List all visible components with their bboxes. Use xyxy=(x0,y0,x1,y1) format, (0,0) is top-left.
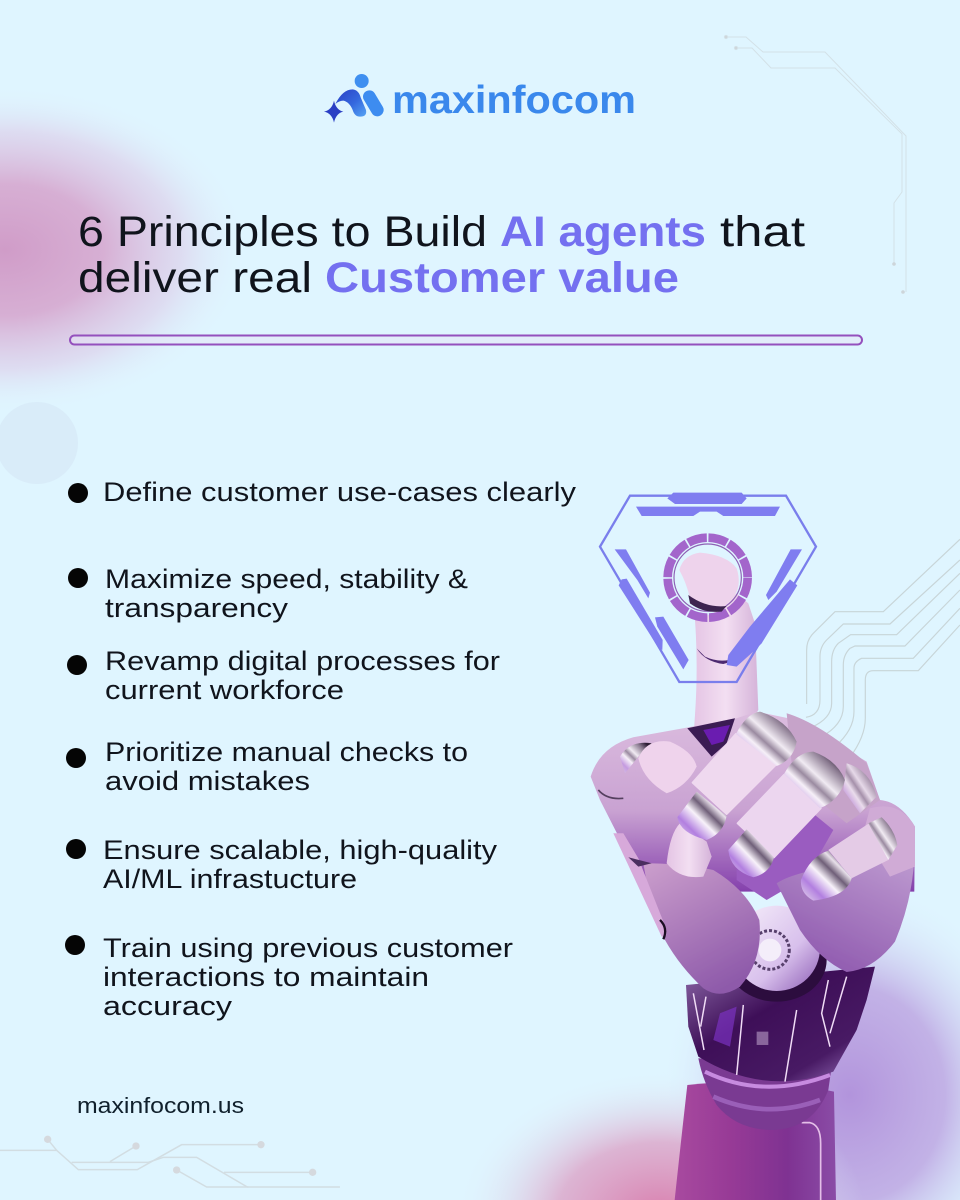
item 4: avoid mistakes xyxy=(105,766,310,796)
forearm xyxy=(675,1082,836,1200)
middle finger xyxy=(738,775,821,857)
item 2: transparency xyxy=(105,593,289,623)
right bars xyxy=(766,549,802,600)
item 2: Maximize speed, stability & xyxy=(105,564,468,594)
item 4 xyxy=(66,737,468,796)
little finger xyxy=(863,806,915,877)
logo wordmark: maxinfocom xyxy=(392,79,636,122)
robot hand xyxy=(591,593,915,994)
item 6 xyxy=(65,933,513,1021)
title: deliver real xyxy=(78,254,312,302)
robot arm and wrist xyxy=(675,906,875,1200)
palm left xyxy=(613,833,915,994)
glass body xyxy=(686,967,875,1081)
bullet list xyxy=(65,477,577,1021)
item 6: interactions to maintain xyxy=(103,962,429,992)
title xyxy=(78,208,805,302)
top bars xyxy=(615,493,802,669)
back finger xyxy=(787,713,880,823)
item 2 xyxy=(68,564,468,623)
icon: logo mark xyxy=(324,74,377,123)
title: 6 Principles to Build xyxy=(78,208,487,256)
holographic triangle frame xyxy=(600,493,816,682)
thumb xyxy=(620,743,652,773)
palm right xyxy=(777,837,915,972)
item 5: Ensure scalable, high-quality xyxy=(103,835,498,865)
divider bar xyxy=(70,336,862,344)
item 3: current workforce xyxy=(105,675,344,705)
footer url: maxinfocom.us xyxy=(77,1093,244,1118)
hand silhouette xyxy=(591,712,915,892)
item 3: Revamp digital processes for xyxy=(105,646,500,676)
item 5: AI/ML infrastucture xyxy=(103,864,357,894)
item 3 xyxy=(67,646,500,705)
index knuckle finger xyxy=(693,734,777,814)
logo xyxy=(324,74,636,123)
item 4: Prioritize manual checks to xyxy=(105,737,468,767)
title: that xyxy=(720,208,805,256)
purple hollow of the hand xyxy=(737,800,833,900)
centre disc xyxy=(727,918,827,1002)
target ring xyxy=(668,538,748,618)
item 1: Define customer use-cases clearly xyxy=(103,477,577,507)
title: Customer value xyxy=(325,254,679,302)
left bars xyxy=(615,549,650,598)
wrist collar xyxy=(698,1058,832,1130)
item 5 xyxy=(66,835,498,894)
title: AI agents xyxy=(500,208,706,256)
index finger xyxy=(693,593,758,740)
item 6: accuracy xyxy=(103,991,233,1021)
item 6: Train using previous customer xyxy=(103,933,513,963)
circuit lines: right side xyxy=(806,539,960,757)
circuit lines: bottom left xyxy=(0,1136,340,1187)
fingertip xyxy=(679,553,739,612)
ring finger lower xyxy=(667,823,712,877)
circuit lines: top right xyxy=(724,35,906,294)
